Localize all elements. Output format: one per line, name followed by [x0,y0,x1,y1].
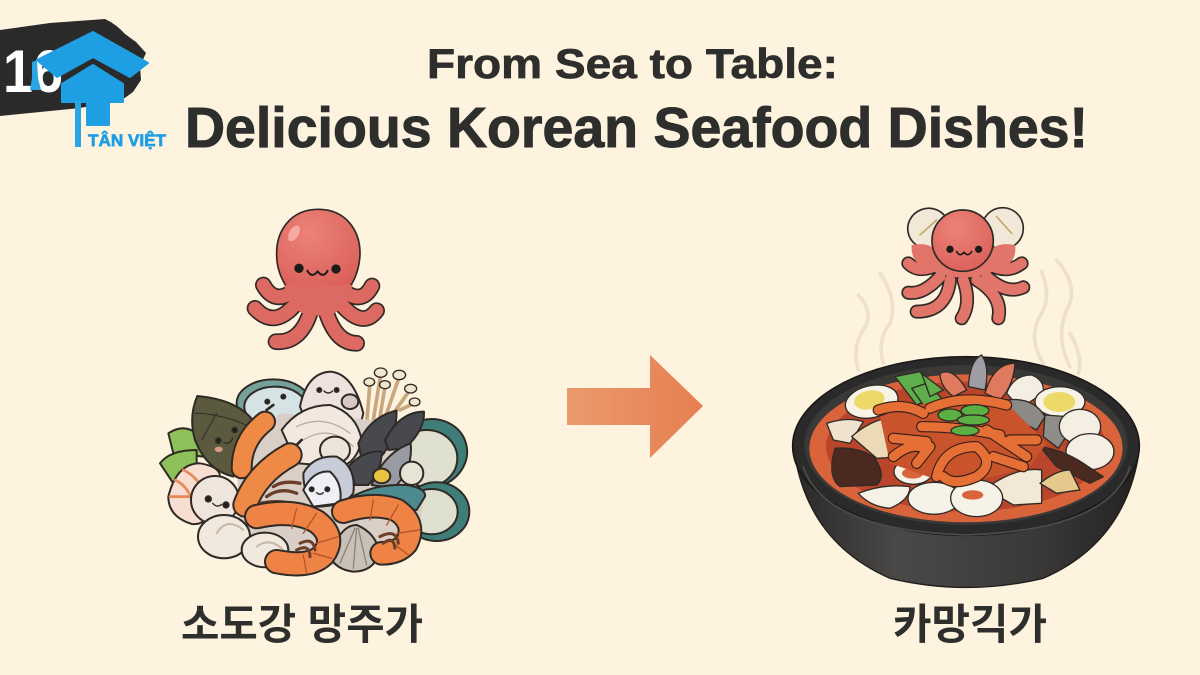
white fish ball back [1007,375,1043,408]
mussel with yellow [372,443,423,488]
lower shrimps [257,500,420,573]
white clam with face [300,372,363,427]
stone bowl stew [793,355,1139,587]
steam [856,260,1080,373]
striped shrimp left [168,463,220,524]
fish cakes right [1007,400,1068,448]
tofu cabbage right [993,469,1080,505]
broth [809,374,1123,522]
rim front highlight [803,467,1130,535]
greens [160,428,203,483]
dark conch [192,396,255,477]
logo: Tan Viet badge: 16 [3,38,63,105]
tteok mound base [880,400,1047,483]
octopus: raw [255,209,377,343]
upper shrimps [242,405,302,505]
tteok and squid strips [878,400,1037,482]
dark mussels [348,411,424,485]
logo: Tan Viet badge: TÂN VIỆT [88,131,167,150]
big white clam [282,405,362,467]
blue clam with face [303,457,354,507]
teal mussel shells [385,411,475,541]
top left clam [237,379,310,427]
label: stew: 카망긱가 [893,601,1047,648]
egg and fish cake slices [858,459,1003,517]
seafood pile [160,368,475,573]
title: From Sea to Table: [427,40,838,87]
blue teal mussel [347,485,425,510]
enoki mushrooms [364,368,420,423]
mussels [940,355,1015,400]
scallions back [895,372,943,405]
swirl shells [198,515,288,567]
fish balls right [1059,409,1114,470]
mushrooms [832,447,1103,487]
boiled egg right [1035,387,1085,417]
title: Delicious Korean Seafood Dishes! [185,96,1088,160]
boiled egg left [842,380,901,423]
scallion garnish [938,405,989,436]
bowl rim [793,357,1139,535]
octopus: cooked with lemon slices [902,202,1023,318]
bowl body [795,457,1138,587]
arrow [567,355,703,458]
scallop [330,525,379,572]
title [185,40,1088,160]
logo: Tan Viet badge [0,19,167,150]
pile base [237,413,423,567]
tofu dumpling left [827,417,908,458]
label: raw seafood: 소도강 망주가 [181,601,423,648]
white ball with face [191,476,239,524]
